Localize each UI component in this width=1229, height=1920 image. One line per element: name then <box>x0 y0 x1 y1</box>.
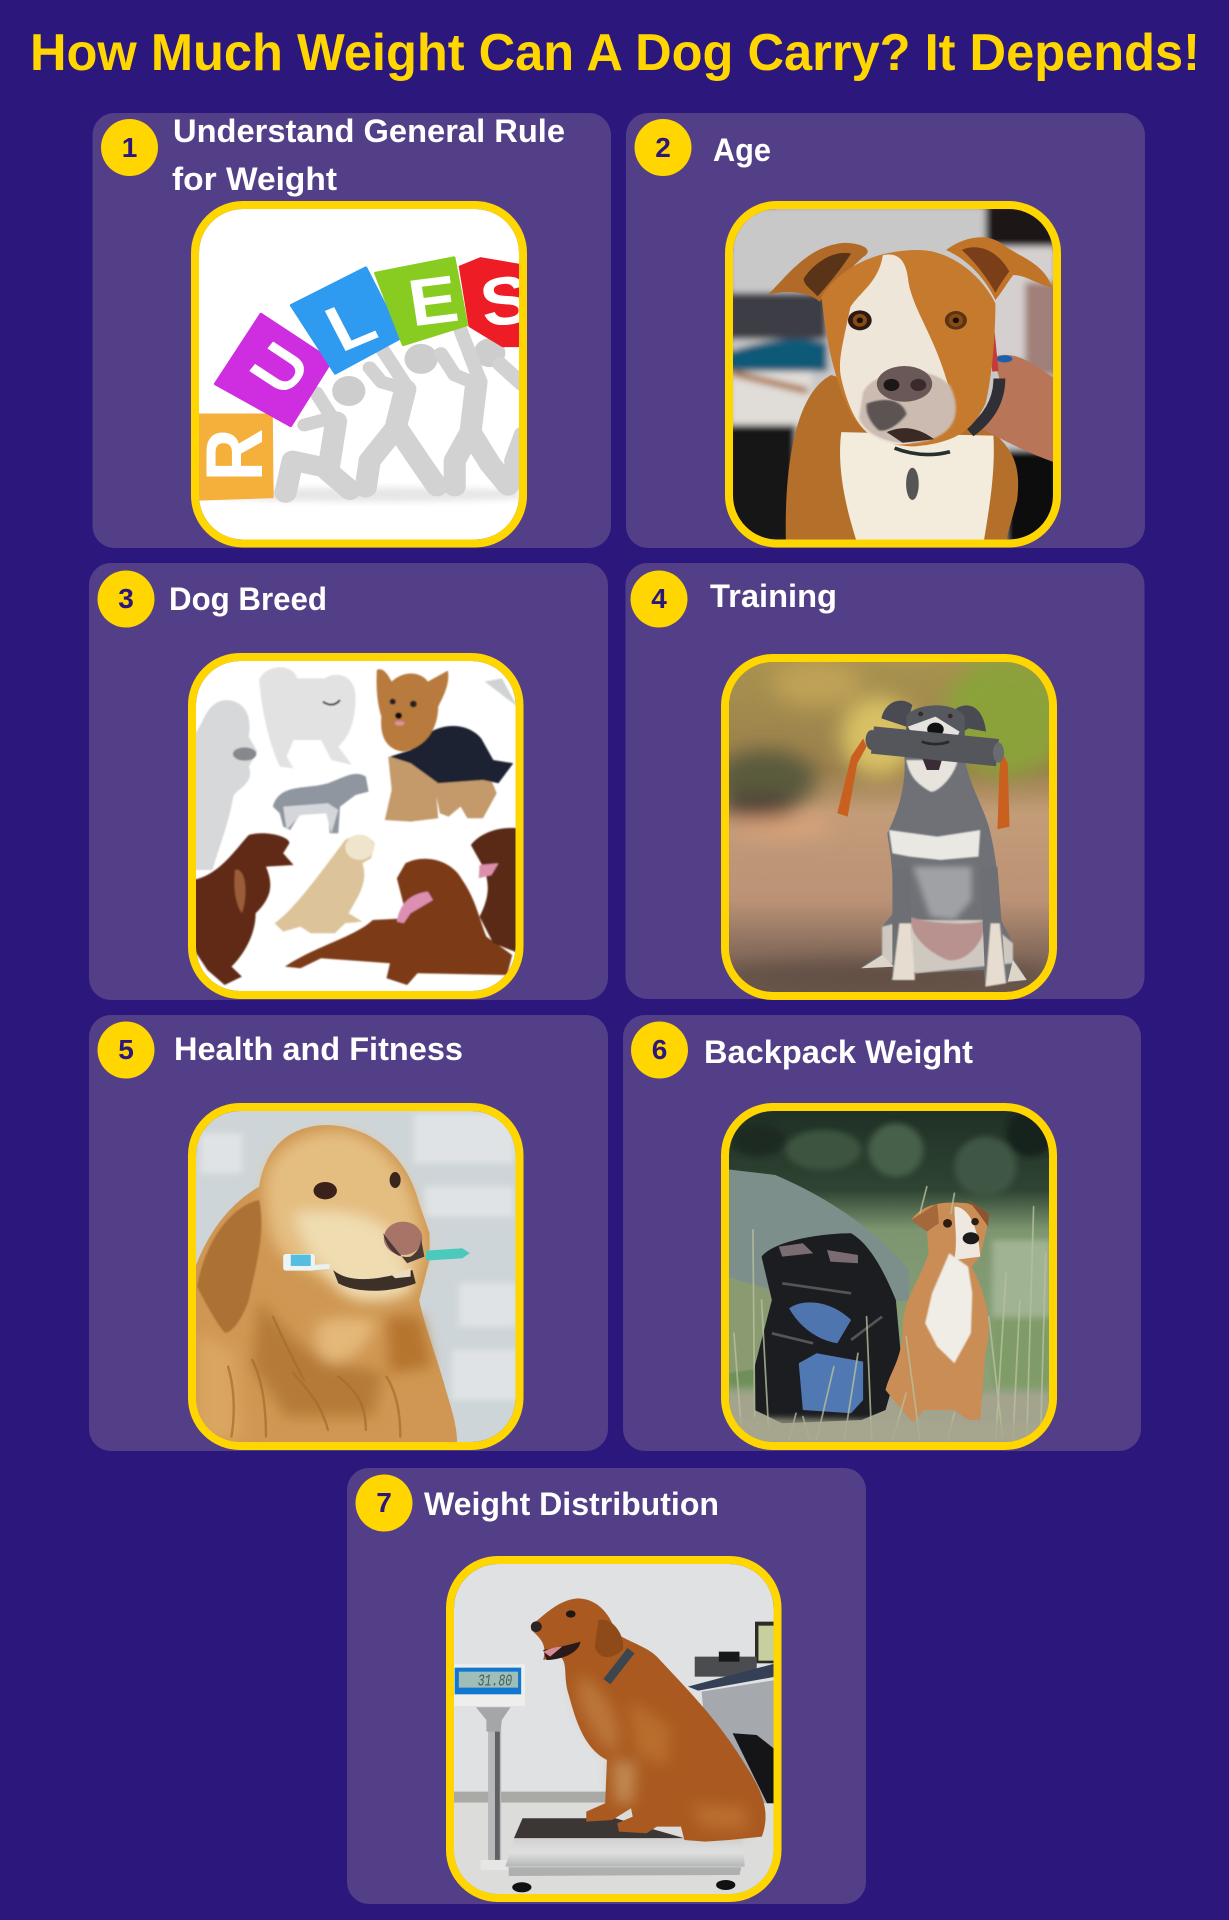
heading: Weight Distribution <box>424 1486 719 1522</box>
heading: Training <box>710 578 837 614</box>
panel background <box>626 563 1144 999</box>
panel: 1 Understand General Rule for Weight <box>92 113 611 548</box>
number badge 7 <box>356 1474 412 1532</box>
number badge 5: 5 <box>118 1034 134 1065</box>
number badge 3 <box>98 570 154 628</box>
number badge 1 <box>101 119 158 176</box>
number badge 4 <box>630 570 688 628</box>
photo: people lifting RULES blocks: S <box>475 261 536 342</box>
photo: people lifting RULES blocks <box>199 209 519 540</box>
photo: people lifting RULES blocks: U <box>235 331 325 406</box>
panel background <box>89 563 608 1000</box>
photo: golden retriever on a scale <box>450 1560 777 1897</box>
photo frame <box>195 205 523 544</box>
panel: 5 Health and Fitness <box>89 1015 608 1451</box>
title: How Much Weight Can A Dog Carry? It Depends! <box>30 24 1200 82</box>
panel: 2 Age <box>626 113 1145 548</box>
number badge 4: 4 <box>651 583 667 614</box>
panel: 7 Weight Distribution <box>347 1468 866 1904</box>
number badge 1: 1 <box>122 132 137 163</box>
heading: Understand General Rule <box>173 113 565 149</box>
panel: 6 Backpack Weight <box>623 1015 1141 1451</box>
photo: golden retriever on a scale: 31.80 <box>478 1673 512 1692</box>
number badge 5 <box>98 1022 154 1078</box>
panel: 3 Dog Breed <box>89 563 608 1000</box>
photo: backpack and dog in a field <box>727 1110 1054 1445</box>
number badge 6: 6 <box>652 1034 667 1065</box>
photo frame <box>729 205 1057 544</box>
panel background <box>347 1468 866 1904</box>
panel: 4 Training <box>626 563 1144 999</box>
heading <box>172 113 565 197</box>
panel background <box>89 1015 608 1451</box>
photo frame <box>725 1107 1053 1446</box>
number badge 2 <box>634 119 692 176</box>
photo: people lifting RULES blocks: R <box>189 429 280 481</box>
heading: Dog Breed <box>169 581 327 617</box>
number badge 2: 2 <box>655 132 671 163</box>
photo: brown and white dog <box>729 205 1057 543</box>
heading: Backpack Weight <box>704 1034 973 1070</box>
photo: golden retriever with toothbrush <box>192 1110 519 1443</box>
photo: people lifting RULES blocks: E <box>403 261 463 340</box>
panel background <box>92 113 611 548</box>
photo: dog holding training toy <box>729 662 1049 992</box>
photo: people lifting RULES blocks: L <box>315 285 387 366</box>
grass blades in foreground <box>734 1187 1046 1440</box>
heading: Health and Fitness <box>174 1031 463 1067</box>
number badge 6 <box>631 1022 688 1078</box>
panel background <box>623 1015 1141 1451</box>
photo: collage of dog breeds <box>192 661 519 991</box>
photo frame <box>192 657 520 995</box>
panel background <box>626 113 1145 548</box>
number badge 7: 7 <box>376 1487 392 1518</box>
heading: for Weight <box>172 161 337 197</box>
number badge 3: 3 <box>118 583 134 614</box>
heading: Age <box>713 132 771 168</box>
photo frame <box>192 1107 520 1446</box>
photo frame <box>725 658 1053 996</box>
photo frame <box>450 1560 778 1898</box>
